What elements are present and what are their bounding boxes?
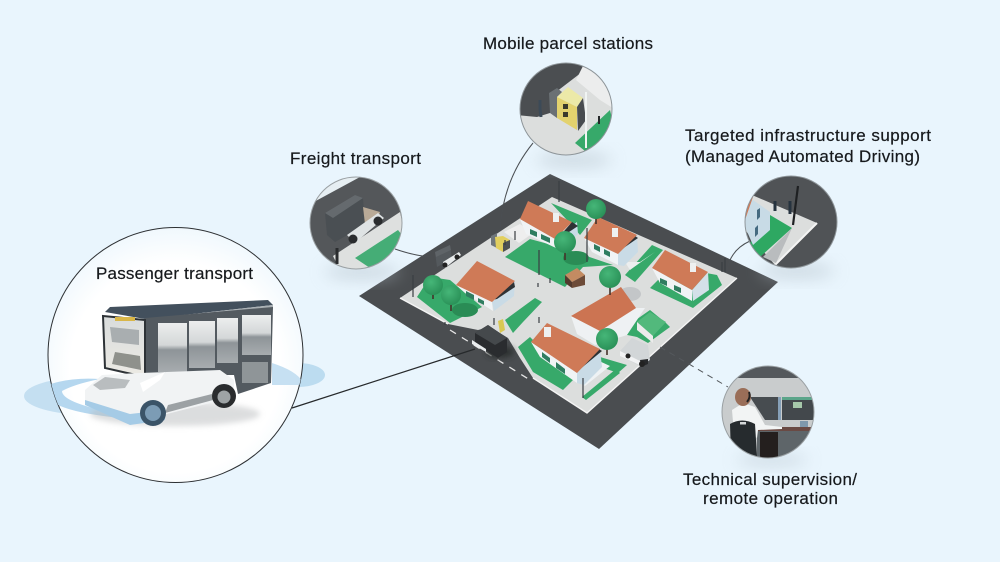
bus roof: [105, 300, 273, 319]
poles and people: [413, 181, 725, 398]
road: [520, 64, 583, 117]
lamp post: [585, 92, 587, 148]
white lower pod: [85, 370, 234, 423]
bus windscreen: [103, 316, 145, 377]
operator: [732, 403, 782, 438]
road markings: [450, 330, 530, 380]
lawn: [355, 230, 402, 268]
label: [683, 470, 857, 508]
chair: [730, 420, 757, 456]
freight vehicle: [435, 245, 461, 268]
house D: [456, 261, 515, 311]
house C: [652, 250, 709, 301]
house A: [520, 201, 578, 248]
label: remote operation: [703, 489, 838, 508]
bus: [85, 300, 273, 426]
trees: [423, 199, 621, 355]
connector: freight transport: [395, 249, 432, 257]
panel: passenger transport: [24, 228, 325, 482]
destination display: [115, 317, 135, 321]
kiosk: [549, 88, 562, 118]
waves inside circle: [48, 363, 304, 418]
parcel station: [491, 233, 510, 252]
kiosk: [565, 268, 585, 288]
person: [540, 100, 541, 117]
house wall: [745, 200, 770, 245]
monitors: [750, 397, 778, 420]
lawns: [417, 203, 722, 400]
connector: mobile parcel stations: [500, 143, 533, 230]
sidewalk: [745, 195, 817, 265]
lawn: [575, 110, 612, 150]
lawn: [750, 215, 792, 257]
label: Mobile parcel stations: [483, 34, 653, 53]
connector: infrastructure support: [727, 241, 750, 271]
people: [775, 201, 790, 214]
bus side glazing: [145, 307, 273, 394]
panel: infrastructure support: [685, 126, 931, 279]
label: Passenger transport: [96, 264, 253, 283]
panel: freight transport: [290, 149, 421, 280]
label: Technical supervision/: [683, 470, 857, 489]
person: [336, 248, 338, 264]
house B: [584, 217, 638, 266]
passenger vehicle: [472, 325, 514, 358]
road surface: [359, 174, 778, 449]
map: neighbourhood block: [359, 174, 778, 449]
autonomous car: [620, 338, 650, 367]
panel: technical supervision: [683, 366, 857, 508]
desk: [757, 427, 814, 431]
sidewalk: [333, 212, 404, 270]
label: [685, 126, 931, 166]
lamp post: [793, 186, 798, 225]
sensor waves: [24, 363, 325, 415]
label: Targeted infrastructure support: [685, 126, 931, 145]
wheels: [212, 384, 236, 408]
sidewalk plaza: [400, 197, 737, 413]
connector: passenger transport: [292, 349, 475, 408]
circle frame: [48, 228, 303, 482]
tree shadows: [452, 251, 589, 317]
second parcel station: [498, 319, 505, 333]
panel: mobile parcel stations: [483, 34, 653, 168]
house F: [531, 323, 602, 385]
label: (Managed Automated Driving): [685, 147, 920, 166]
light paved pads: [504, 224, 533, 243]
label: Freight transport: [290, 149, 421, 168]
truck: [325, 195, 365, 242]
house E: [571, 287, 645, 345]
connector: technical supervision: [660, 347, 728, 387]
